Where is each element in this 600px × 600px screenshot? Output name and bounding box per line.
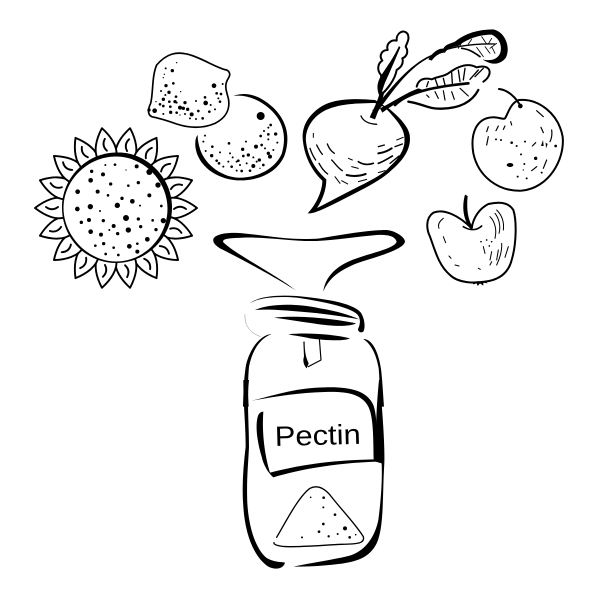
jar body <box>243 380 384 569</box>
jar lid <box>245 296 365 340</box>
funnel <box>213 230 405 292</box>
icon: beet <box>303 29 508 213</box>
jar shoulders <box>243 334 384 407</box>
icon: lemon <box>147 53 230 127</box>
icon: round apple <box>472 89 563 191</box>
icon: orange <box>195 94 287 180</box>
beet leaf left <box>378 32 408 95</box>
jar tag <box>303 338 321 368</box>
beet leaf upper right <box>428 29 508 64</box>
jar label <box>252 387 377 477</box>
icon: sunflower <box>35 126 197 290</box>
pectin powder pile <box>274 487 364 547</box>
jar <box>243 296 384 569</box>
icon: cut apple <box>427 195 516 286</box>
beet stems <box>370 53 435 119</box>
beet leaf lower right <box>395 65 490 109</box>
label text: Pectin <box>274 419 361 452</box>
